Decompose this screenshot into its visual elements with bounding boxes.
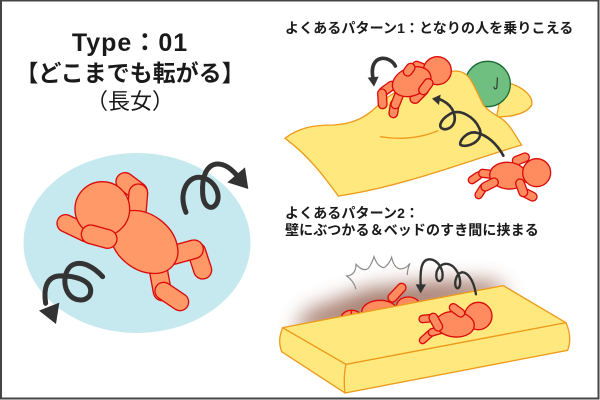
heading: pattern 2: よくあるパターン2： bbox=[285, 205, 419, 221]
title: （長女） bbox=[86, 89, 174, 114]
brown wall shadow bbox=[293, 282, 510, 335]
child figure on the floor bbox=[472, 157, 551, 197]
heading: pattern 1: よくあるパターン1：となりの人を乗りこえる bbox=[285, 20, 573, 36]
impact burst lines bbox=[347, 257, 410, 289]
child stuck behind the bed bbox=[341, 288, 420, 326]
title: Type：01 bbox=[72, 29, 188, 57]
arrow: bouncing spiral bbox=[416, 259, 476, 294]
panel: pattern 1 scene bbox=[285, 57, 551, 197]
panel: pattern 2 scene bbox=[280, 257, 570, 393]
arrow: spiral top right bbox=[183, 164, 248, 212]
arrow: spiral bottom left bbox=[39, 263, 103, 324]
child figure on the blanket bbox=[382, 57, 451, 113]
child figure on the mattress bbox=[423, 302, 492, 340]
title bbox=[15, 29, 245, 114]
panel: main rolling figure bbox=[24, 153, 250, 333]
rolling child figure bbox=[66, 182, 203, 302]
title: 【どこまでも転がる】 bbox=[15, 60, 245, 86]
heading: pattern 2: 壁にぶつかる＆ベッドのすき間に挟まる bbox=[285, 222, 539, 238]
blanket front bbox=[285, 71, 522, 196]
arrow: spiral over blanket bbox=[432, 95, 503, 156]
blanket back bbox=[497, 82, 532, 117]
blue ellipse bbox=[24, 153, 250, 333]
mattress bbox=[280, 286, 570, 393]
arrow: curved down to blanket edge bbox=[368, 58, 395, 87]
sleeping green head bbox=[465, 61, 510, 107]
heading: pattern 2 bbox=[285, 205, 539, 238]
